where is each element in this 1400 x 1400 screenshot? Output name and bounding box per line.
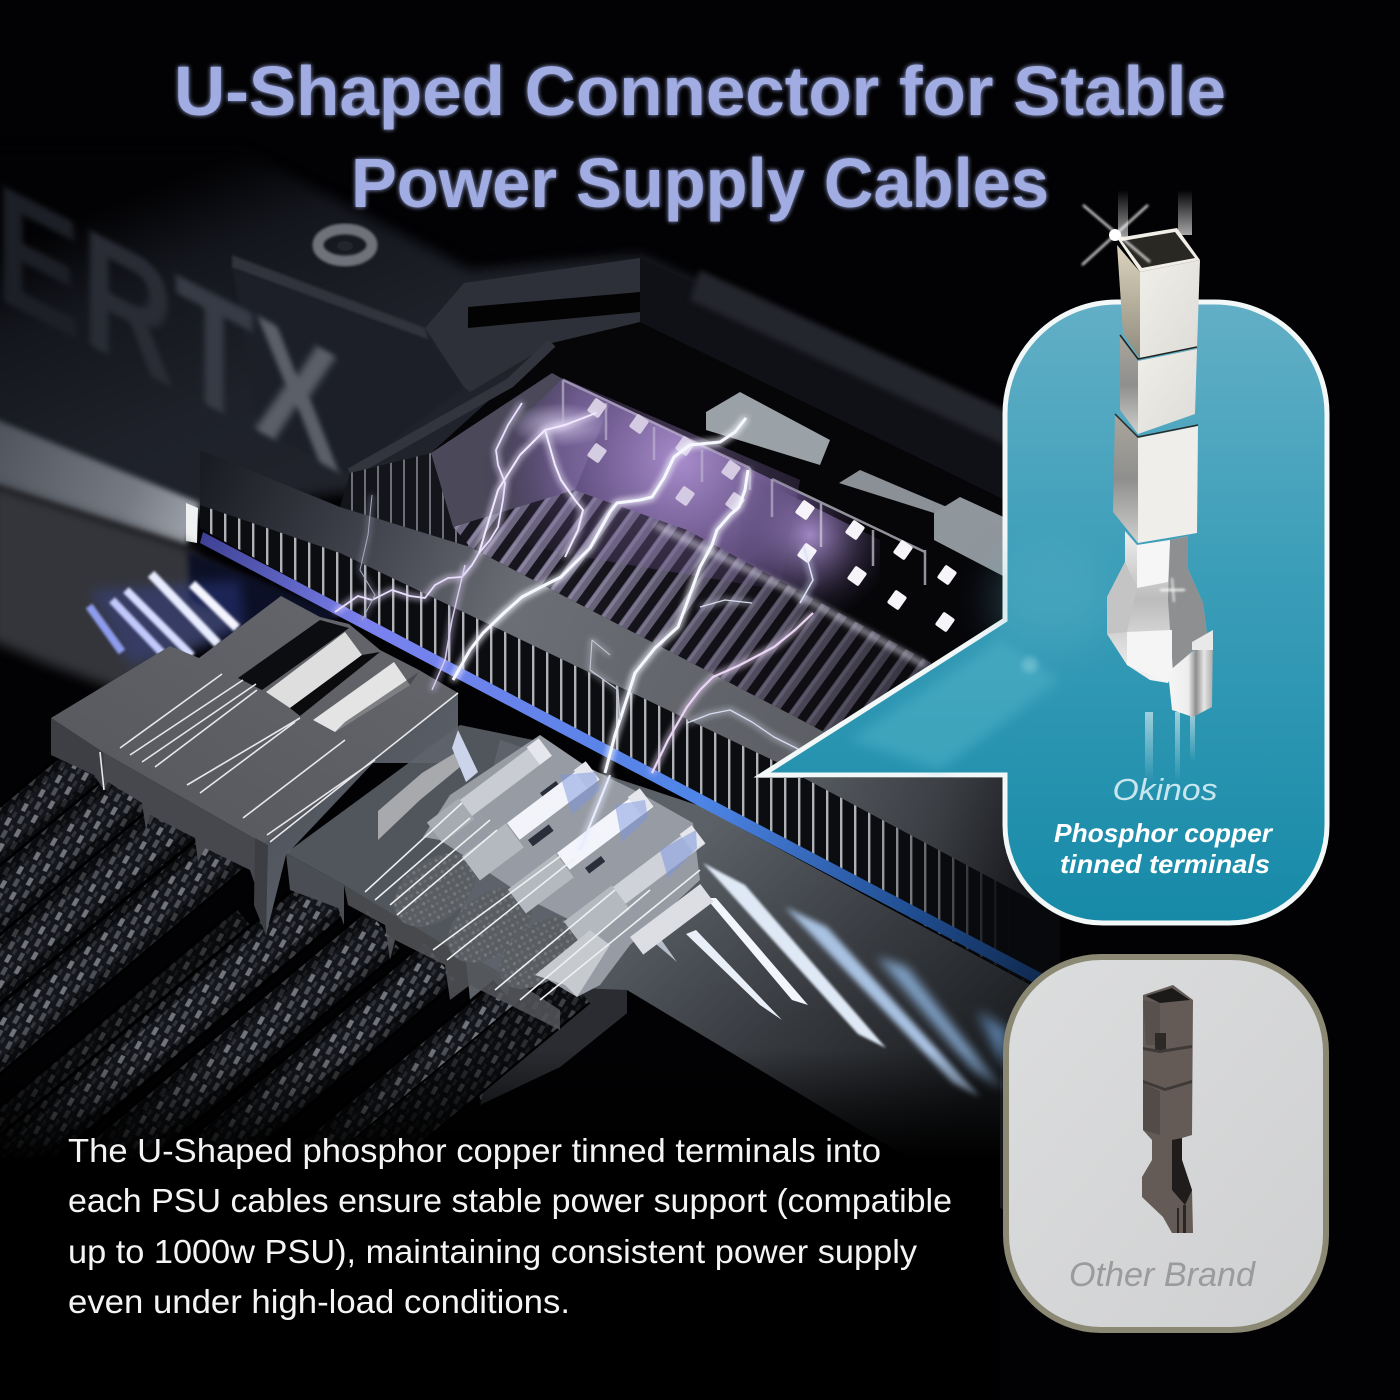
- tube mid: [1120, 336, 1138, 434]
- purple glow over fins: [470, 378, 800, 590]
- braided cables behind connector 1: [0, 760, 250, 1185]
- fade behind body text: [0, 1050, 1000, 1160]
- blue light strip: [200, 532, 1045, 986]
- Okinos label: Okinos: [1112, 772, 1218, 807]
- tube lower: [1113, 415, 1138, 543]
- body description text: up to 1000w PSU), maintaining consistent power supply: [68, 1233, 918, 1270]
- teal callout panel: [762, 302, 1327, 923]
- lightning arcs: [335, 403, 813, 850]
- body description text: [68, 1132, 952, 1320]
- terminal slots: [528, 781, 605, 874]
- body description text: even under high-load conditions.: [68, 1283, 570, 1320]
- port frame lines: [563, 380, 925, 585]
- connector base box: [480, 985, 627, 1105]
- graphics card shroud with RTX lettering: [0, 146, 1005, 690]
- pin: [1168, 634, 1213, 717]
- other brand corroded terminal: [1142, 985, 1193, 1233]
- blue tints: [560, 772, 600, 815]
- upper-left fins behind band: [340, 453, 470, 547]
- white edge lines: [100, 674, 458, 842]
- grey ramp: [0, 417, 200, 545]
- ridge: [350, 343, 552, 473]
- terminal rear bodies: [427, 798, 630, 997]
- terminal bars: [459, 738, 552, 816]
- plug slots: [238, 620, 349, 690]
- RTX lettering: ERTX: [0, 146, 340, 509]
- crimp barrels: [380, 838, 594, 1003]
- sparkles: [1082, 205, 1185, 602]
- body description text: each PSU cables ensure stable power support (compatible: [68, 1182, 952, 1219]
- connector 2 translucent housing: [286, 725, 714, 1030]
- lower graphics card plate: [460, 740, 1040, 1230]
- upper-left blurred light stripes: [89, 552, 345, 665]
- body description text: The U-Shaped phosphor copper tinned terminals into: [68, 1132, 881, 1169]
- title: Power Supply Cables: [351, 144, 1049, 222]
- title: U-Shaped Connector for Stable: [174, 52, 1226, 130]
- tube top: [1117, 228, 1200, 272]
- grey heatsink band: [200, 450, 826, 767]
- latch blocks: [706, 392, 830, 465]
- haze panel: [431, 373, 610, 527]
- head silhouette: [1107, 531, 1207, 683]
- lower-right light stripes: [643, 863, 1007, 1097]
- title: [174, 52, 1226, 222]
- light dust streak: [655, 525, 925, 665]
- other brand comparison card: [1006, 957, 1326, 1330]
- other brand label: Other Brand: [1069, 1256, 1256, 1294]
- lower heatsink fins: [200, 505, 1060, 1000]
- terminal description: tinned terminals: [1060, 849, 1270, 879]
- upper heatsink fins: [453, 490, 935, 733]
- connector 1 solid housing: [51, 596, 458, 935]
- terminal description: [1054, 818, 1274, 879]
- band section below callout tail: [757, 769, 1060, 915]
- pins: [587, 397, 957, 633]
- terminal base mass: [423, 735, 700, 997]
- braided cables behind connector 2: [0, 895, 575, 1200]
- graphics card connector port with pins: [350, 322, 1010, 735]
- terminal description: Phosphor copper: [1054, 818, 1274, 848]
- Okinos terminal illustration: [1082, 190, 1213, 782]
- shroud step: [425, 258, 640, 392]
